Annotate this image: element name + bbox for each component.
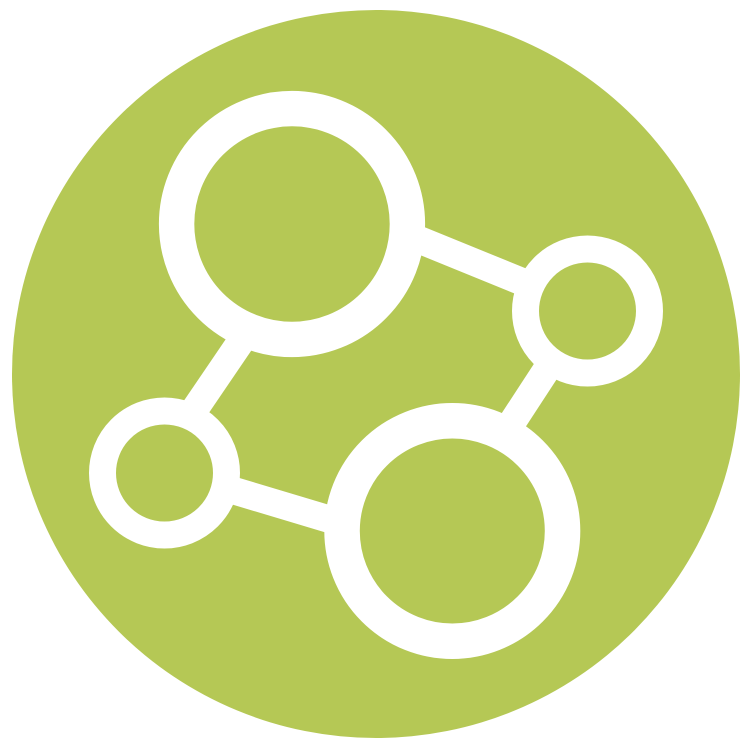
large node top left bbox=[177, 109, 407, 339]
large node bottom bbox=[342, 421, 563, 641]
small node left bbox=[102, 411, 226, 535]
network connectors bbox=[180, 232, 567, 524]
small node right bbox=[526, 249, 650, 373]
